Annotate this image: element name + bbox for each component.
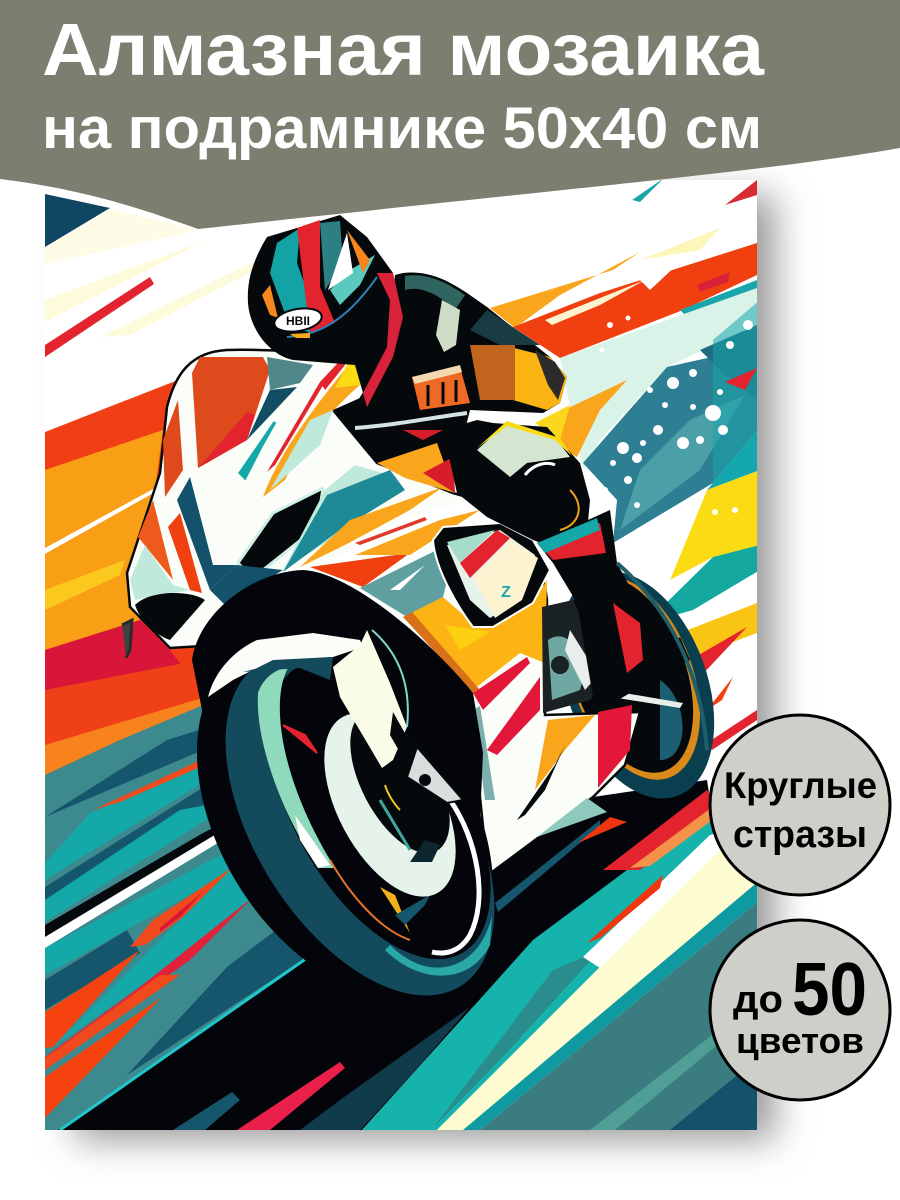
- under nose: [135, 593, 205, 640]
- handlebar: [355, 413, 467, 428]
- engine: [542, 600, 593, 713]
- windscreen: [192, 357, 270, 468]
- glove: [412, 365, 470, 410]
- lower body marks: [535, 715, 595, 790]
- badge: up to 50 colors: до: [733, 979, 783, 1021]
- helmet logo: [275, 307, 323, 331]
- badge: up to 50 colors: [710, 920, 890, 1100]
- lower rim highlight: [385, 915, 492, 976]
- helmet: [248, 215, 403, 407]
- left orange bands: [45, 380, 210, 775]
- right rim line: [432, 800, 479, 953]
- side intake: [433, 523, 550, 627]
- badge: round rhinestones: [710, 715, 890, 895]
- badge: round rhinestones: Круглые: [724, 765, 877, 806]
- upper right streaks: [490, 252, 640, 328]
- orange flames: [300, 487, 443, 567]
- mirror stalk: [122, 620, 132, 658]
- header banner: [0, 0, 900, 229]
- headlight: [238, 488, 323, 578]
- front fender and fork: [208, 630, 463, 803]
- mint waves: [283, 465, 397, 570]
- thigh and knee: [450, 420, 590, 542]
- shin and boot: [537, 510, 690, 703]
- canvas shadow: [75, 195, 775, 1140]
- painting: motorcycle racer: [45, 178, 760, 1130]
- helmet logo: HBII: [286, 314, 310, 328]
- big orange panel: [403, 580, 547, 690]
- orange thigh: [377, 443, 455, 493]
- mint rim band: [258, 668, 335, 868]
- left teal bands: [45, 706, 293, 1130]
- lower right colors: [362, 822, 714, 1130]
- painting background: [45, 178, 760, 1130]
- subtitle: на подрамнике 50х40 см: [42, 96, 762, 161]
- rider: [333, 273, 707, 750]
- windscreen stripes: [263, 370, 360, 497]
- nose trim: [177, 477, 237, 590]
- badge: up to 50 colors: 50: [792, 947, 867, 1031]
- paint splatter: [600, 316, 753, 518]
- motorcycle fairing: Z: [501, 584, 511, 601]
- title: Алмазная мозаика: [42, 8, 765, 91]
- black road: [58, 780, 710, 1130]
- torso: [355, 273, 567, 430]
- badge: up to 50 colors: цветов: [736, 1020, 864, 1061]
- under-arm shadow: [333, 398, 455, 495]
- sleeve: [405, 275, 465, 310]
- motorcycle fairing: [122, 350, 683, 875]
- black wheel arch: [192, 570, 483, 816]
- badge: round rhinestones: стразы: [733, 814, 867, 856]
- rear wheel: [569, 572, 714, 798]
- front wheel: [196, 658, 494, 996]
- brake disc: [297, 692, 483, 918]
- yellow cuff: [510, 347, 567, 410]
